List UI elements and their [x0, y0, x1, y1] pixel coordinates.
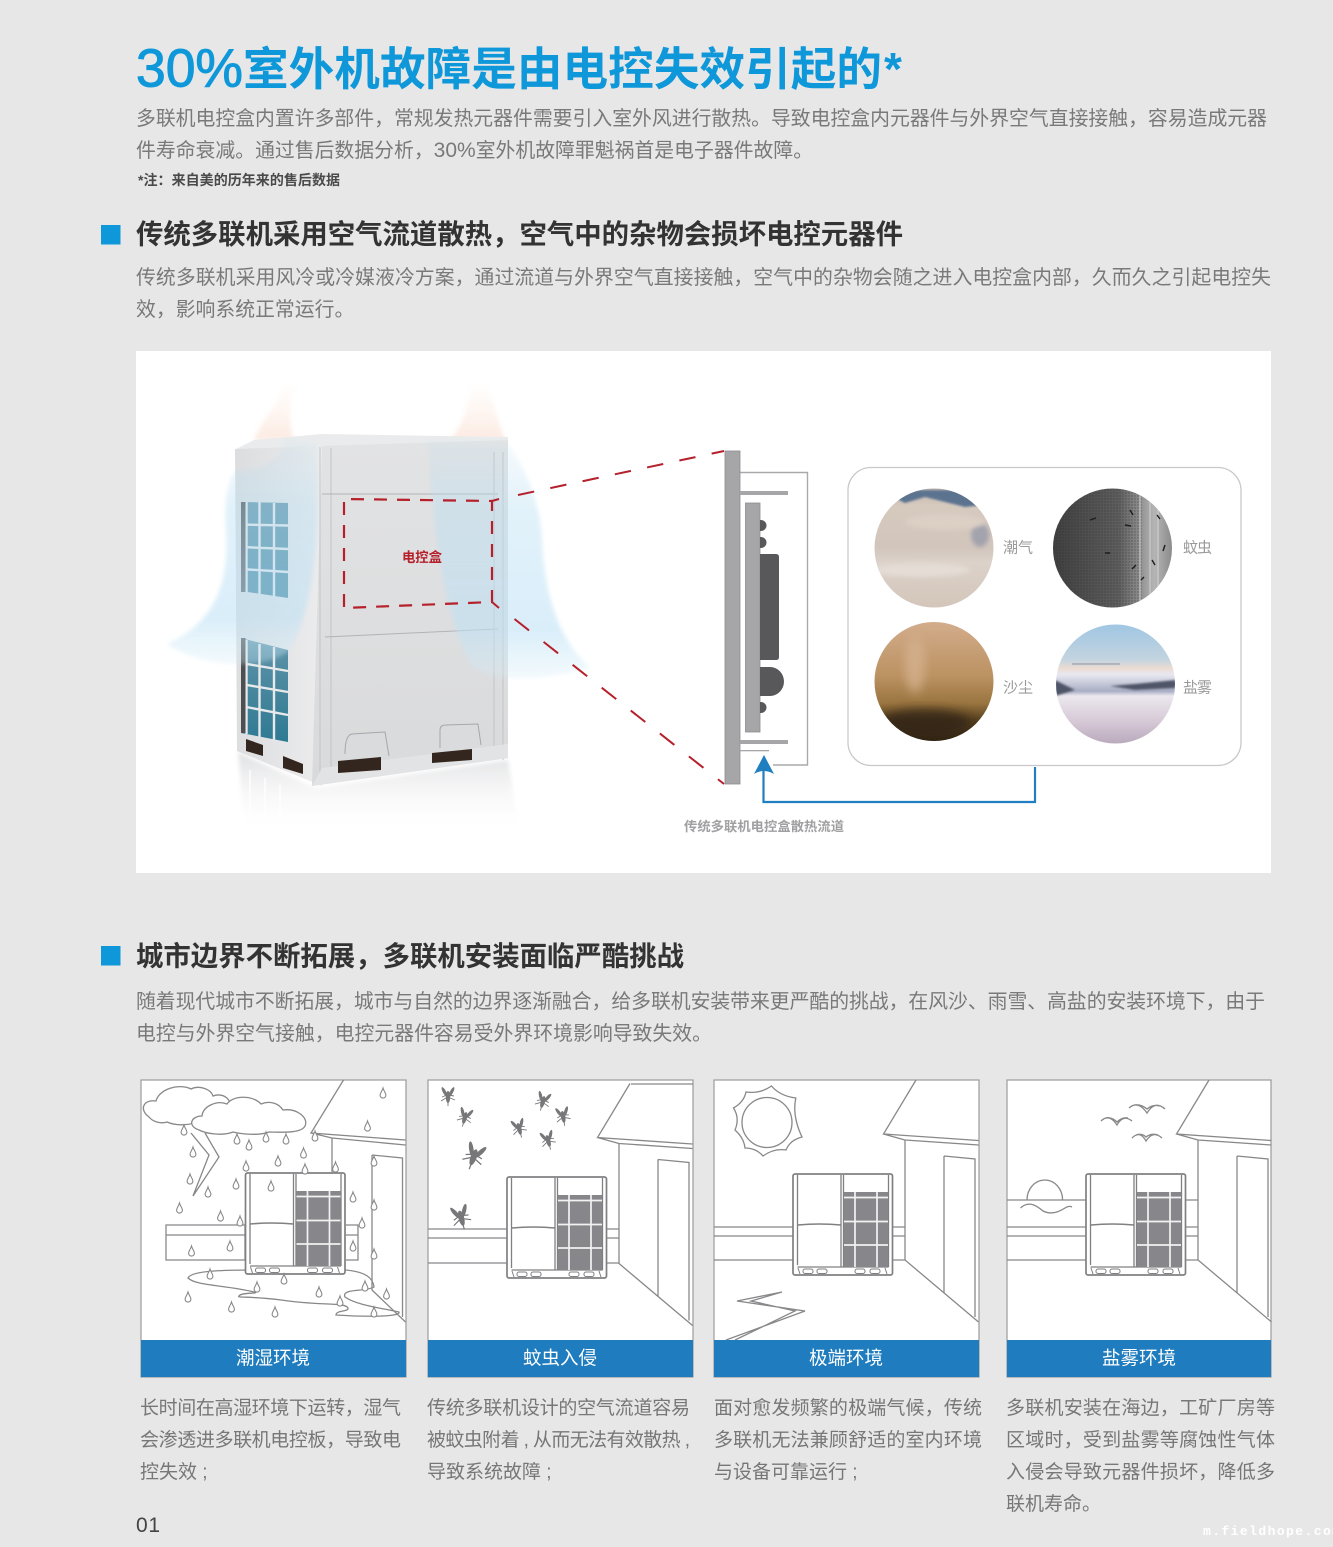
unit: [793, 1174, 892, 1275]
raindrops: [177, 1088, 389, 1317]
section marker 1: [101, 225, 120, 244]
card text 3: 多联机无法兼顾舒适的室内环境: [714, 1429, 982, 1451]
photo: dust: [874, 622, 994, 742]
house: [598, 1084, 693, 1326]
unit: [246, 1173, 345, 1274]
card text 4: 联机寿命。: [1006, 1493, 1101, 1515]
card text 2: 导致系统故障 ;: [427, 1461, 552, 1483]
section paragraph 1: [136, 267, 1271, 321]
unit: [1086, 1174, 1186, 1275]
section paragraph 2: 电控与外界空气接触，电控元器件容易受外界环境影响导致失效。: [136, 1023, 712, 1045]
outdoor unit: [235, 434, 508, 786]
card text 2: 被蚊虫附着 , 从而无法有效散热 ,: [427, 1429, 690, 1451]
banner: [428, 1340, 693, 1377]
card text 2: [427, 1397, 690, 1483]
panel: contaminants: [848, 468, 1241, 766]
cross-section of electric box: [725, 451, 808, 784]
airflow right: [428, 440, 590, 679]
card text 4: 多联机安装在海边，工矿厂房等: [1006, 1397, 1275, 1419]
lower grille: [241, 638, 288, 742]
section heading 2: 城市边界不断拓展，多联机安装面临严酷挑战: [136, 940, 684, 972]
lightning: [191, 1133, 219, 1196]
fence: [166, 1225, 358, 1260]
card text 1: 控失效 ;: [140, 1461, 208, 1483]
card text 3: 面对愈发频繁的极端气候，传统: [714, 1397, 982, 1419]
card text 2: 传统多联机设计的空气流道容易: [427, 1397, 690, 1419]
page number: 01: [136, 1514, 160, 1537]
card text 3: 与设备可靠运行 ;: [714, 1461, 858, 1483]
intro paragraph: [136, 108, 1267, 162]
unit: [507, 1177, 606, 1278]
house: [884, 1080, 978, 1322]
card text 4: 区域时，受到盐雾等腐蚀性气体: [1006, 1429, 1275, 1451]
card: extreme climate: [714, 1080, 979, 1377]
card text 3: [714, 1397, 982, 1483]
card text 1: 会渗透进多联机电控板，导致电: [140, 1429, 401, 1451]
card: mosquitoes: [428, 1080, 693, 1377]
banner: [1007, 1340, 1271, 1377]
title: 30%: [136, 40, 243, 98]
intro paragraph: 多联机电控盒内置许多部件，常规发热元器件需要引入室外风进行散热。导致电控盒内元器件与外界空气直接接触，容易造成元器: [136, 108, 1267, 130]
card: salt mist: [1007, 1080, 1272, 1377]
reflection under unit: [238, 752, 520, 835]
mosquitoes: [441, 1086, 572, 1232]
base strip: [312, 744, 508, 786]
section paragraph 2: [136, 991, 1265, 1045]
banner: [714, 1340, 979, 1377]
label: mosquitoes: 蚊虫: [1183, 540, 1212, 556]
title: 室外机故障是由电控失效引起的: [243, 44, 882, 95]
intro paragraph: 件寿命衰减。通过售后数据分析，30%室外机故障罪魁祸首是电子器件故障。: [136, 139, 813, 162]
banner: [141, 1340, 406, 1377]
wall lines: [428, 1229, 619, 1263]
feet: [246, 739, 472, 774]
heat plumes: [254, 380, 505, 440]
card: humid environment: [141, 1080, 406, 1377]
section marker 2: [101, 946, 120, 966]
section paragraph 1: 效，影响系统正常运行。: [136, 299, 354, 321]
dashed electric box: [344, 499, 492, 608]
photo: salt mist: [1055, 624, 1176, 744]
house: [1176, 1080, 1272, 1322]
unit front: [312, 440, 508, 786]
banner label: 盐雾环境: [1102, 1348, 1176, 1368]
unit top lid: [236, 434, 508, 449]
section heading 1: 传统多联机采用空气流道散热，空气中的杂物会损坏电控元器件: [136, 218, 903, 250]
section paragraph 2: 随着现代城市不断拓展，城市与自然的边界逐渐融合，给多联机安装带来更严酷的挑战，在风沙、雨雪、高盐的安装环境下，由于: [136, 991, 1265, 1013]
setting sun: [1027, 1180, 1063, 1200]
wall lines: [1007, 1200, 1198, 1260]
title: *: [884, 43, 902, 95]
wave: [1020, 1204, 1072, 1213]
card text 1: [140, 1397, 401, 1483]
sun: [734, 1086, 802, 1156]
wall lines: [714, 1227, 905, 1260]
puddle: [188, 1270, 399, 1316]
panel: air duct diagram: [136, 351, 1271, 873]
unit side: [235, 446, 322, 786]
clouds: [143, 1087, 306, 1134]
ground crack: [726, 1292, 805, 1340]
label: moisture: 潮气: [1003, 540, 1033, 556]
house: [311, 1080, 406, 1322]
upper grille: [241, 502, 288, 598]
section paragraph 1: 传统多联机采用风冷或冷媒液冷方案，通过流道与外界空气直接接触，空气中的杂物会随之进入电控盒内部，久而久之引起电控失: [136, 267, 1271, 289]
card text 1: 长时间在高湿环境下运转，湿气: [140, 1397, 401, 1419]
label: salt mist: 盐雾: [1183, 680, 1212, 696]
banner label: 蚊虫入侵: [523, 1348, 597, 1368]
label: dust: 沙尘: [1003, 680, 1033, 696]
caption: duct: 传统多联机电控盒散热流道: [684, 818, 844, 834]
card text 4: 入侵会导致元器件损坏，降低多: [1006, 1461, 1275, 1483]
zoom projection lines: [492, 451, 724, 784]
banner label: 潮湿环境: [236, 1348, 310, 1368]
birds: [1101, 1105, 1165, 1141]
banner label: 极端环境: [809, 1348, 883, 1368]
card text 4: [1006, 1397, 1275, 1515]
footnote: *注：来自美的历年来的售后数据: [138, 172, 340, 188]
label: electric box: 电控盒: [402, 549, 443, 565]
photo: moisture: [870, 488, 994, 608]
airflow left: [167, 440, 318, 664]
photo: mosquitoes: [1052, 488, 1172, 610]
arrow: airflow into box: [754, 755, 1035, 802]
